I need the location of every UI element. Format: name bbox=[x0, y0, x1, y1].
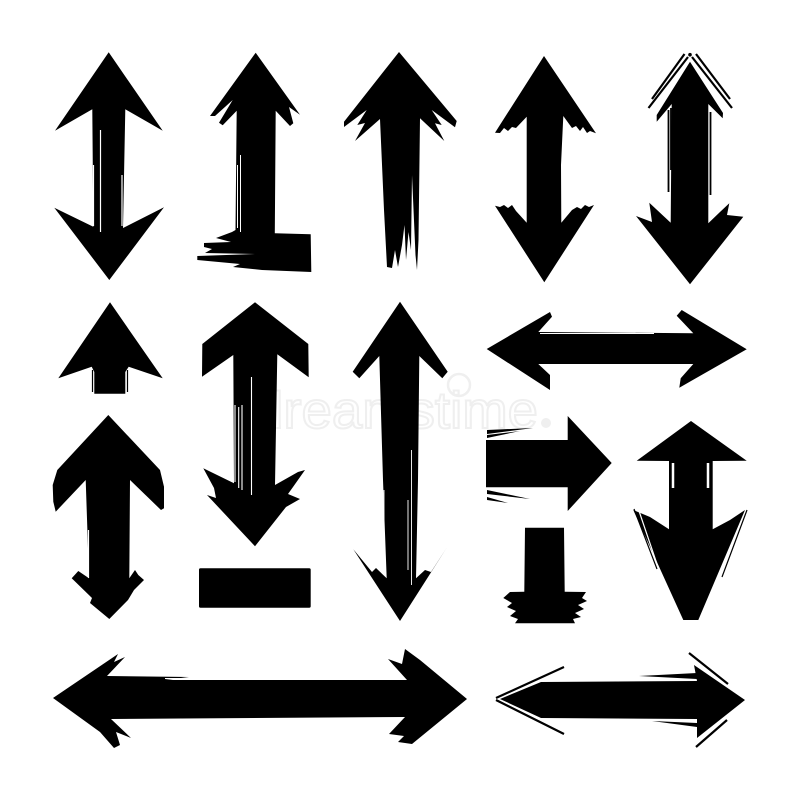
arrow 7: up with small lower head bbox=[53, 415, 164, 619]
watermark: dreamstime bbox=[253, 382, 538, 440]
arrow 6: small up bbox=[58, 302, 163, 394]
arrow 1: double vertical bbox=[54, 52, 164, 280]
arrow 13: up top, wide down head bbox=[633, 421, 747, 620]
arrow 14: long double horizontal bbox=[53, 649, 467, 748]
arrow 2: up with bar base bbox=[197, 53, 311, 272]
arrow 11: right bbox=[486, 416, 612, 511]
arrow 10: double horizontal bbox=[487, 310, 747, 390]
arrow 9: tall double vertical bbox=[353, 302, 448, 621]
arrow 8: double vertical with wide head bbox=[202, 302, 309, 546]
arrow 5: double vertical with chevron strokes bbox=[636, 53, 743, 284]
arrow 12: stub with ragged base bbox=[503, 528, 587, 623]
arrow 15: horizontal with stroked left head bbox=[496, 653, 745, 747]
arrow 4: double vertical wide bbox=[495, 56, 596, 282]
arrow 3: up with brushed tail bbox=[344, 52, 457, 270]
bar: horizontal block bbox=[199, 568, 311, 608]
